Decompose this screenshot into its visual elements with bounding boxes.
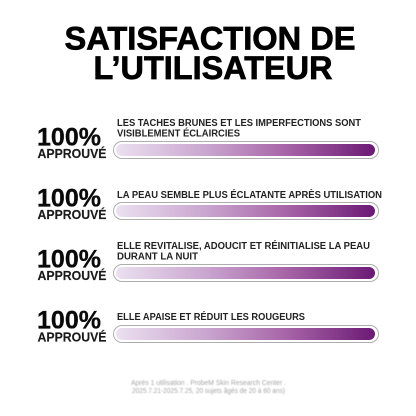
statement text: VISIBLEMENT ÉCLAIRCIES: [117, 126, 240, 140]
stat: 100% approuvé: 100%: [37, 184, 101, 212]
stat: 100% approuvé: APPROUVÉ: [38, 146, 107, 161]
stat: 100% approuvé: APPROUVÉ: [38, 207, 107, 222]
panel: row 3: [37, 239, 378, 283]
stat: 100% approuvé: 100%: [37, 124, 101, 152]
statement text: ELLE REVITALISE, ADOUCIT ET RÉINITIALISE LA PEAU: [117, 239, 370, 252]
title: SATISFACTION DE: [64, 20, 356, 56]
title: [64, 20, 356, 86]
panel: row 4: [37, 306, 378, 344]
stat: 100% approuvé: [37, 124, 107, 161]
panel: row 2: [37, 184, 382, 222]
stat: 100% approuvé: [37, 246, 107, 283]
stat: 100% approuvé: APPROUVÉ: [38, 330, 107, 344]
footnote: Après 1 utilisation . ProbeM Skin Research Center .: [131, 378, 286, 387]
statement text: LA PEAU SEMBLE PLUS ÉCLATANTE APRÈS UTILISATION: [117, 188, 382, 201]
title: L’UTILISATEUR: [94, 50, 332, 86]
progress bar: [114, 202, 378, 220]
statement text: LES TACHES BRUNES ET LES IMPERFECTIONS SONT: [117, 118, 362, 129]
stat: 100% approuvé: APPROUVÉ: [38, 268, 107, 283]
stat: 100% approuvé: 100%: [37, 246, 101, 274]
progress bar: [114, 326, 378, 342]
statement text: [117, 118, 362, 140]
footnote: [131, 378, 286, 395]
stat: 100% approuvé: [37, 184, 107, 222]
progress bar: [114, 264, 378, 282]
stat: 100% approuvé: 100%: [37, 306, 101, 334]
panel: row 1: [37, 118, 378, 161]
statement text: DURANT LA NUIT: [117, 252, 199, 262]
footnote: 2025.7.21-2025.7.25, 20 sujets âgés de 20 à 60 ans): [132, 386, 285, 395]
statement text: [117, 239, 370, 262]
progress bar: [114, 142, 378, 158]
stat: 100% approuvé: [37, 306, 107, 344]
statement text: ELLE APAISE ET RÉDUIT LES ROUGEURS: [117, 310, 305, 323]
